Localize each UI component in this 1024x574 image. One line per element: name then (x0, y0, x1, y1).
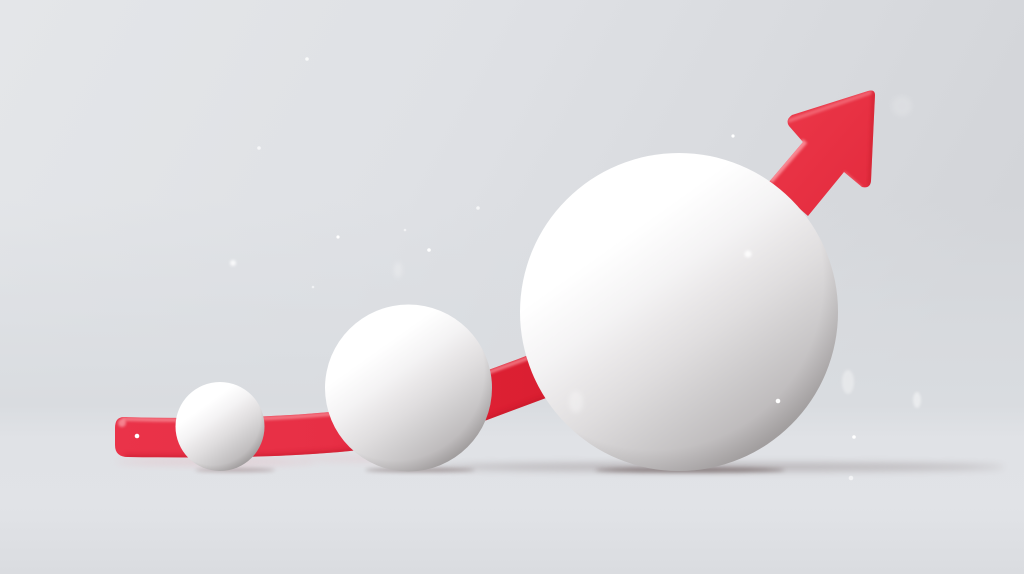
floating particles (135, 57, 921, 480)
floor shadows (115, 456, 1005, 472)
small sphere (176, 382, 264, 471)
large sphere (520, 153, 838, 471)
illustration: spheres growing along a rising red arrow (115, 0, 1024, 480)
red curved arrow (115, 90, 875, 458)
arrow shaft (115, 356, 546, 458)
medium sphere (325, 304, 492, 472)
arrow head (769, 90, 875, 216)
